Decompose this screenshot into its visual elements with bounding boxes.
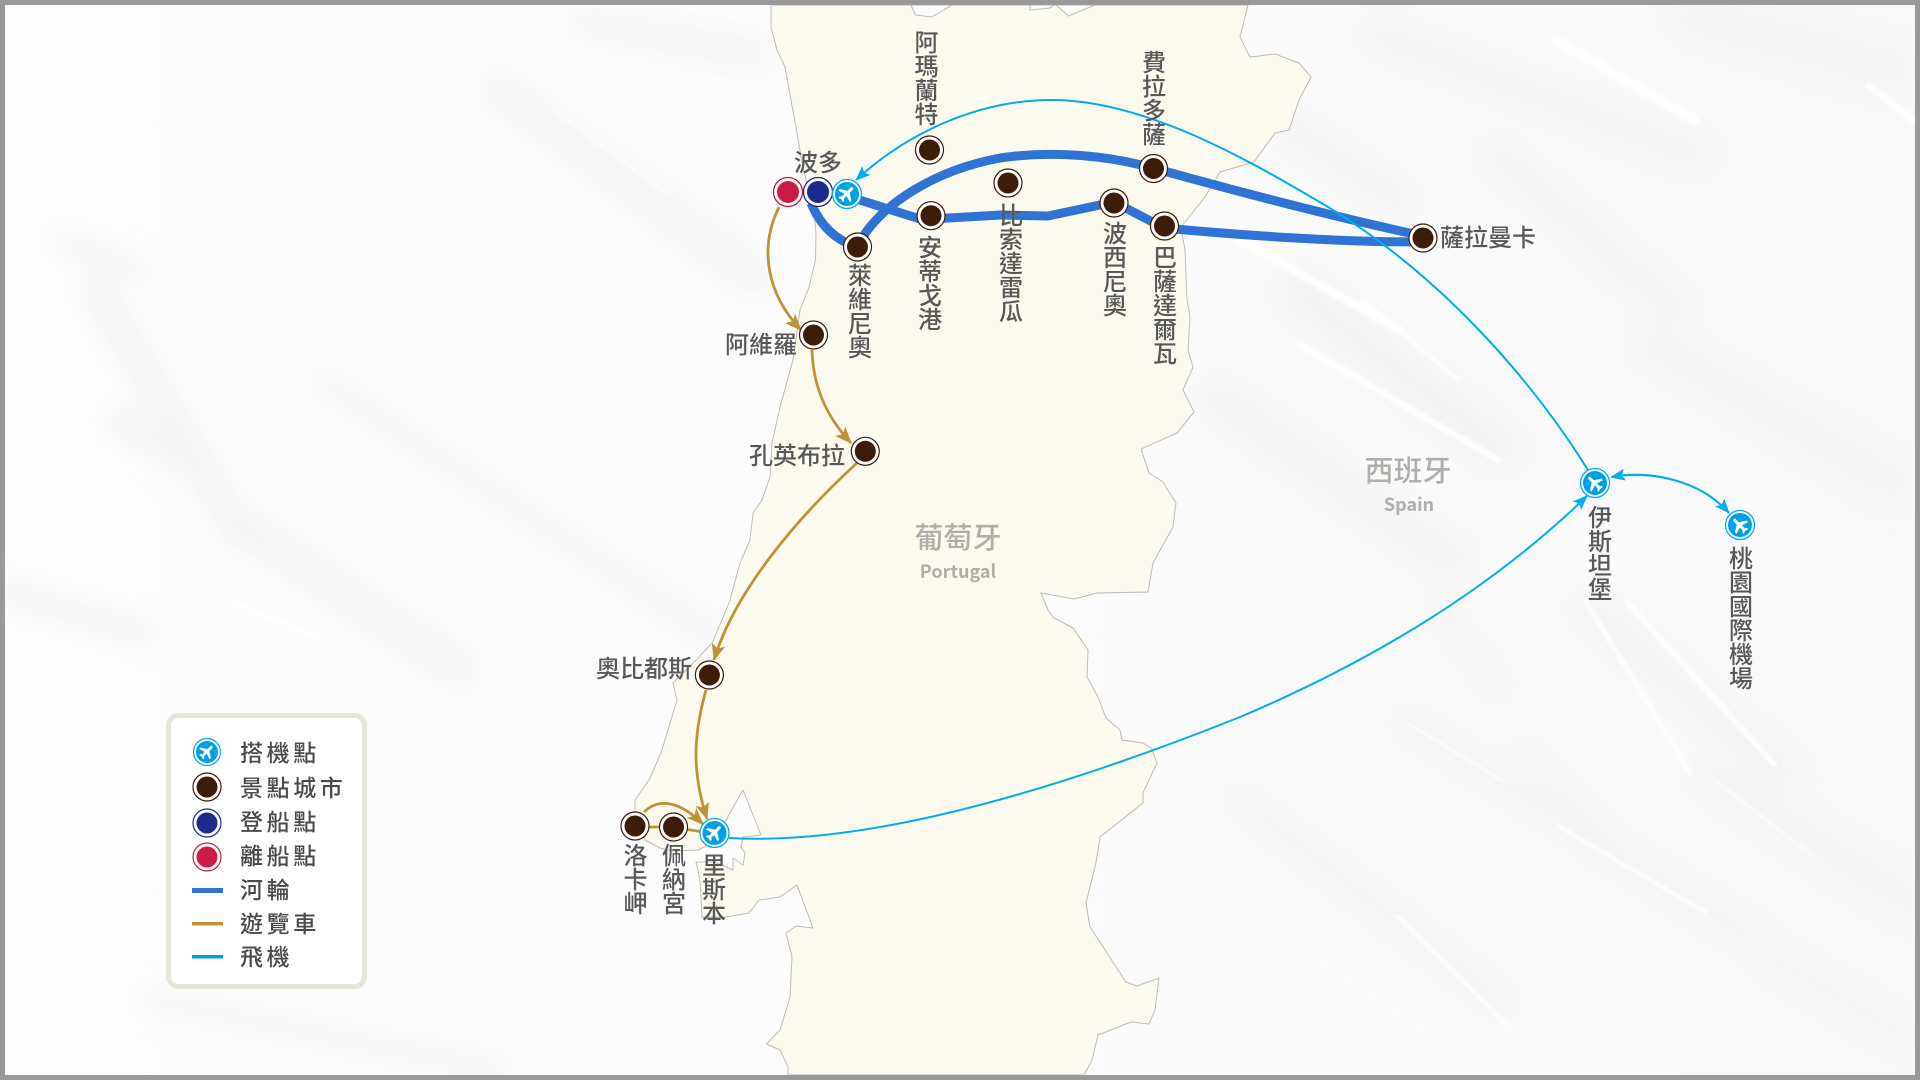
- legend: flight: [192, 938, 293, 972]
- legend: river cruise: 河輪: [240, 871, 293, 905]
- city markers: [621, 136, 1437, 841]
- marker: Istanbul airport: [1580, 468, 1610, 498]
- country label: Portugal: Portugal: [920, 558, 997, 584]
- legend: river cruise: [192, 871, 293, 905]
- legend: disembark: 離船點: [240, 837, 320, 871]
- label: Coimbra: 孔英布拉: [749, 436, 845, 471]
- country label: Portugal: [914, 515, 1002, 584]
- label: Leverinho: 萊維尼奧: [842, 263, 878, 359]
- city labels: [596, 30, 1758, 925]
- legend: flight: 飛機: [240, 938, 293, 972]
- label: Lisbon: 里斯本: [696, 853, 732, 925]
- country label: Spain: 西班牙: [1364, 448, 1452, 490]
- country label: Spain: Spain: [1384, 491, 1434, 517]
- legend: airport: 搭機點: [240, 734, 320, 768]
- country label: Spain: [1364, 448, 1452, 517]
- label: Entre-os-Rios port: 安蒂戈港: [912, 235, 948, 331]
- label: Aveiro: 阿維羅: [725, 325, 797, 360]
- label: Amarante: 阿瑪蘭特: [909, 30, 944, 126]
- label: Cabo da Roca: 洛卡岬: [618, 843, 653, 915]
- legend: embark: 登船點: [240, 803, 320, 837]
- river cruise routes: [811, 154, 1423, 247]
- label: Ferradosa: 費拉多薩: [1136, 50, 1172, 146]
- label: Salamanca: 薩拉曼卡: [1440, 218, 1536, 253]
- marker: Lisbon airport: [700, 818, 729, 848]
- marker: Porto airport: [832, 180, 862, 208]
- stop markers: [621, 136, 1754, 848]
- legend panel: [168, 716, 364, 986]
- legend: embark: [193, 803, 320, 837]
- legend: airport: [194, 734, 320, 768]
- legend: city: 景點城市: [240, 769, 346, 803]
- label: Bosinho: 波西尼奧: [1098, 221, 1132, 317]
- map: northern border inlets: [911, 5, 1095, 17]
- legend: disembark: [193, 837, 320, 871]
- legend: city: [193, 769, 346, 803]
- label: Pinhao: 比索達雷瓜: [994, 203, 1028, 323]
- map: Portugal landmass: [635, 5, 1311, 1075]
- legend: coach: 遊覽車: [240, 905, 320, 939]
- coach routes: [635, 207, 857, 832]
- label: Bagauste: 巴薩達爾瓦: [1148, 245, 1182, 365]
- marker: Taoyuan airport: [1726, 510, 1754, 540]
- label: Pena Palace: 佩納宮: [656, 843, 692, 915]
- flight routes: [729, 100, 1729, 839]
- label: Taoyuan airport: 桃園國際機場: [1724, 546, 1758, 690]
- label: Porto: 波多: [794, 143, 842, 178]
- label: Istanbul: 伊斯坦堡: [1582, 505, 1618, 601]
- legend: coach: [192, 905, 320, 939]
- marker: embark point: [804, 178, 832, 206]
- country label: Portugal: 葡萄牙: [914, 515, 1002, 557]
- marker: disembark point: [774, 178, 802, 206]
- label: Obidos: 奧比都斯: [596, 649, 692, 684]
